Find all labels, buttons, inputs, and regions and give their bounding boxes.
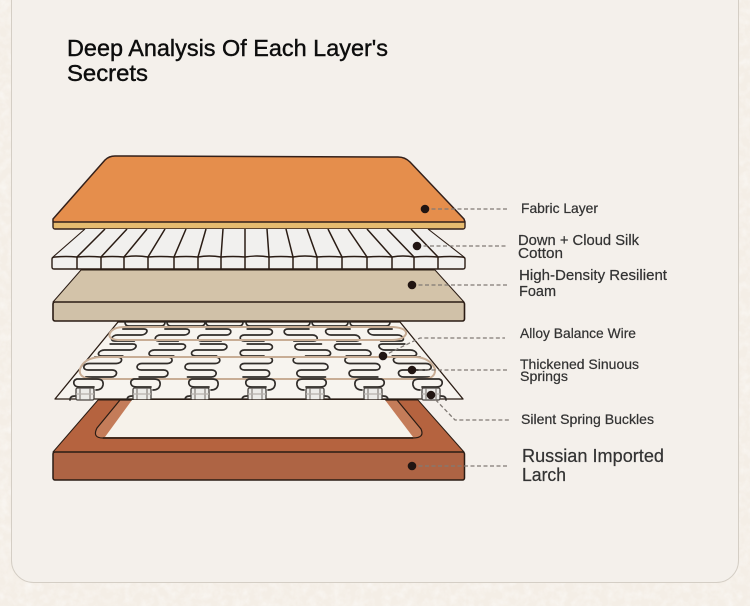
label: russian imported larch: Larch (522, 465, 566, 485)
third spring row (97, 344, 418, 356)
alloy balance wire loops (80, 327, 435, 379)
title: Deep Analysis Of Each Layer's (67, 35, 388, 61)
layer: high-density foam (53, 270, 464, 321)
silent spring buckles (70, 379, 446, 400)
fourth spring row (82, 357, 433, 377)
layer: down and cloud silk cotton (52, 229, 465, 269)
label: down and cloud silk cotton: Down + Cloud Silk (518, 232, 639, 249)
leader: foam (408, 281, 507, 289)
top spring row (125, 322, 390, 326)
label: alloy balance wire: Alloy Balance Wire (520, 325, 636, 341)
layer: sinuous springs (55, 322, 463, 400)
leader: spring buckles (427, 391, 509, 420)
leader: sinuous springs (408, 366, 507, 374)
title: Secrets (67, 60, 148, 86)
label: fabric layer: Fabric Layer (521, 200, 598, 216)
layer: fabric (53, 156, 465, 229)
leader: alloy balance wire (379, 338, 505, 360)
label: russian imported larch: Russian Imported (522, 446, 664, 466)
leader: larch (408, 462, 507, 470)
label: silent spring buckles: Silent Spring Buckles (521, 411, 654, 427)
label: thickened sinuous springs: Springs (520, 368, 568, 384)
label: high-density foam: Foam (519, 283, 556, 300)
leader: fabric layer (421, 205, 507, 213)
leader: down and cloud silk cotton (413, 242, 507, 250)
label: down and cloud silk cotton: Cotton (518, 245, 563, 262)
label: thickened sinuous springs: Thickened Sinuous (520, 356, 639, 372)
spring panel base (55, 322, 463, 399)
second spring row (111, 329, 404, 341)
layer: larch frame (53, 400, 464, 480)
label: high-density foam: High-Density Resilient (519, 267, 668, 284)
